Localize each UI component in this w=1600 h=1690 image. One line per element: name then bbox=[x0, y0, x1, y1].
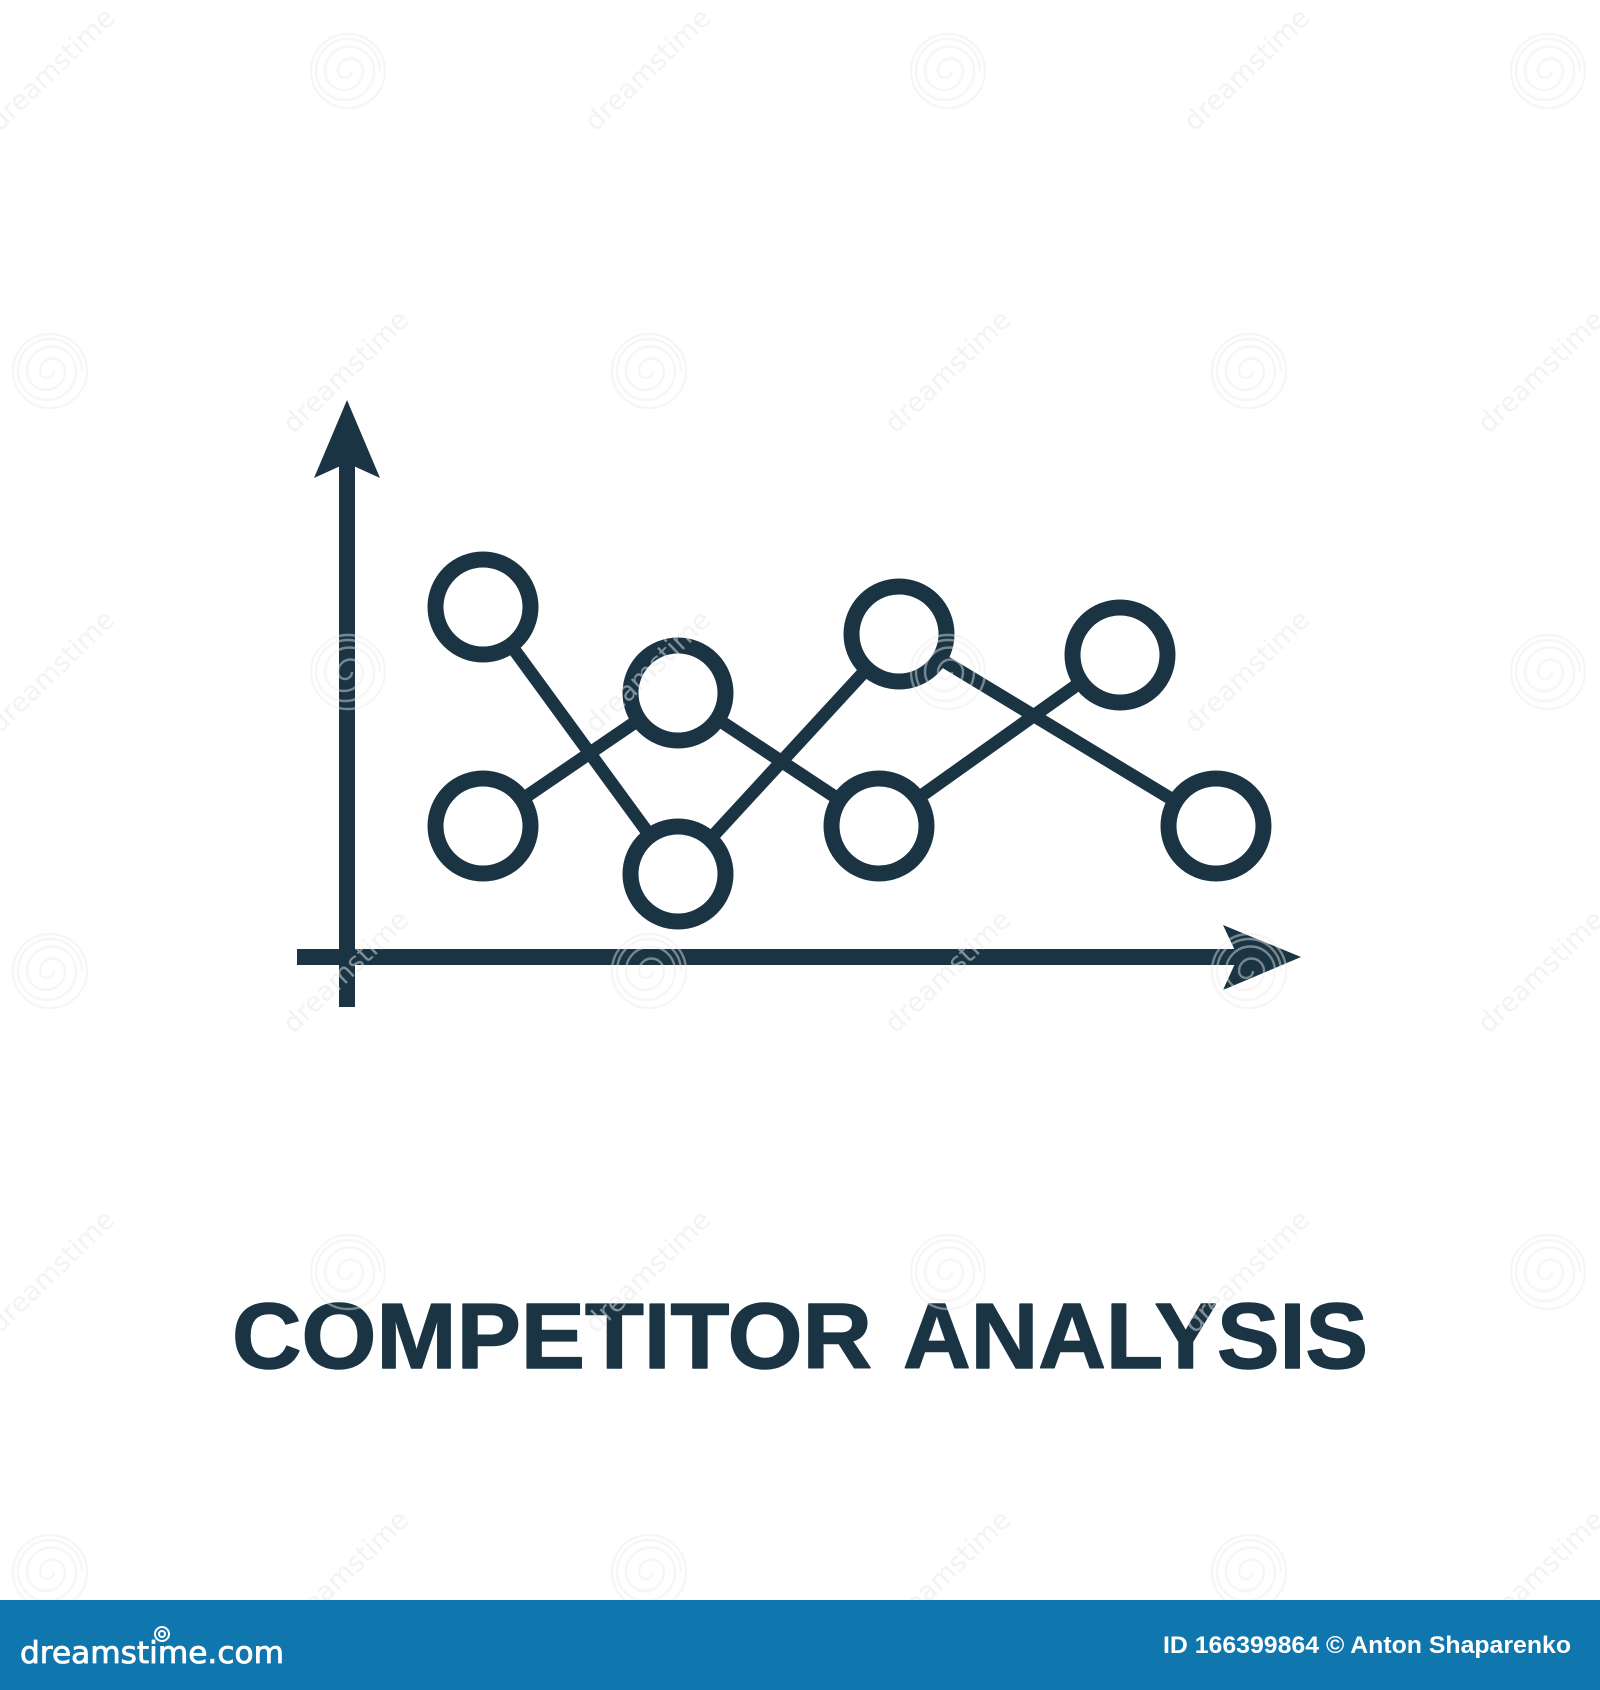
icon: line chart with axes and nodes bbox=[297, 400, 1301, 1007]
footer logo spiral icon bbox=[155, 1627, 169, 1641]
footer bar bbox=[0, 1600, 1600, 1690]
title: ANALYSIS bbox=[903, 1284, 1368, 1388]
watermark text: dreamstime bbox=[579, 604, 717, 739]
watermark text: dreamstime bbox=[277, 304, 415, 439]
footer logo text: dreamstime.com bbox=[20, 1636, 284, 1671]
watermark text: dreamstime bbox=[1178, 2, 1316, 137]
watermark text: dreamstime bbox=[1178, 604, 1316, 739]
x axis arrow bbox=[297, 925, 1301, 990]
watermark text: dreamstime bbox=[879, 904, 1017, 1039]
connecting lines bbox=[483, 607, 1216, 874]
watermark text: dreamstime bbox=[277, 904, 415, 1039]
chart nodes bbox=[436, 560, 1264, 922]
footer credit: ID 166399864 © Anton Shaparenko bbox=[1163, 1632, 1571, 1659]
watermark text: dreamstime bbox=[879, 304, 1017, 439]
watermark text: dreamstime bbox=[579, 2, 717, 137]
y axis arrow bbox=[314, 400, 380, 1007]
watermark text: dreamstime bbox=[579, 1204, 717, 1339]
watermark text: dreamstime bbox=[1178, 1204, 1316, 1339]
title bbox=[232, 1284, 1368, 1388]
title: COMPETITOR bbox=[232, 1284, 872, 1388]
watermark text: dreamstime bbox=[277, 1504, 415, 1639]
watermark text: dreamstime bbox=[879, 1504, 1017, 1639]
